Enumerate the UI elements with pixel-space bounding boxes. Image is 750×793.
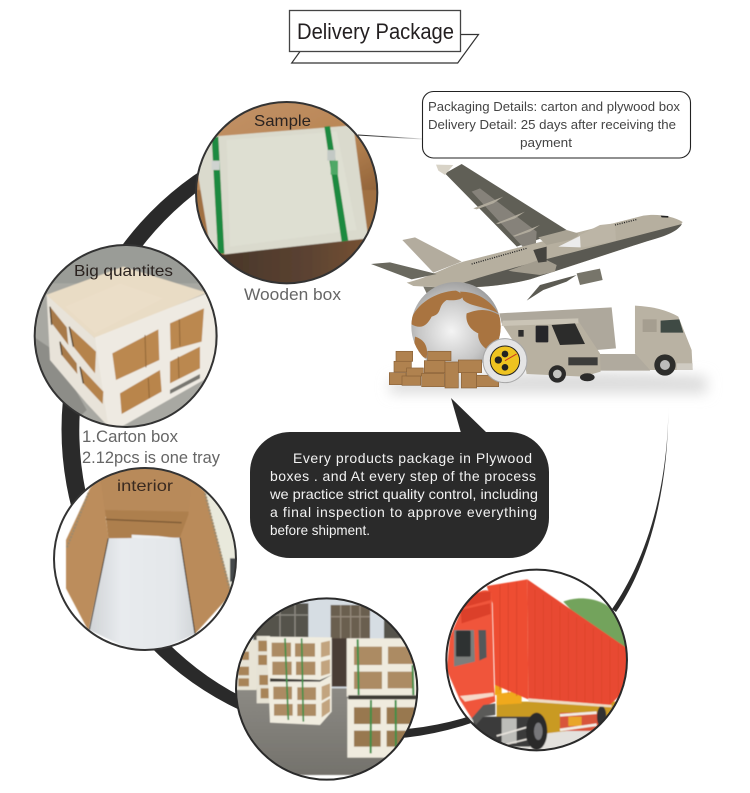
cardboard boxes	[389, 351, 499, 388]
speech bubble: quality control statement: we practice strict quality control, including	[269, 486, 538, 502]
crate stack: right	[347, 638, 417, 758]
callout: packaging and delivery details: payment	[520, 135, 572, 150]
callout: packaging and delivery details: Packaging Details: carton and plywood box	[428, 99, 681, 114]
photo circle: sample wooden box: Sample	[254, 113, 311, 130]
crate stack: far left	[237, 636, 270, 703]
tree	[563, 598, 628, 650]
crate stack: middle	[267, 637, 332, 725]
label: carton box note: 1.Carton box	[82, 427, 178, 446]
speech bubble: quality control statement: a final inspection to approve everything	[270, 504, 537, 520]
photo circle: big quantities carton crate	[34, 244, 218, 428]
callout: packaging and delivery details: Delivery Detail: 25 days after receiving the	[428, 117, 676, 132]
label: wooden box: Wooden box	[244, 286, 342, 304]
speech bubble: quality control statement	[250, 398, 549, 558]
title: Delivery Package	[297, 19, 454, 44]
trailer	[527, 579, 627, 705]
curved black connector ring	[62, 168, 668, 739]
stopwatch	[483, 339, 527, 383]
thin line from sample photo to details box	[358, 135, 422, 139]
callout: packaging and delivery details	[422, 92, 690, 158]
label: carton box note: 2.12pcs is one tray	[82, 448, 220, 467]
van	[502, 318, 601, 383]
speech bubble: quality control statement: Every products package in Plywood	[293, 450, 532, 466]
title	[290, 10, 478, 63]
photo circle: red truck	[446, 570, 633, 753]
airplane	[371, 164, 683, 301]
photo circle: big quantities carton crate: Big quantites	[74, 263, 173, 280]
photo circle: sample wooden box	[190, 97, 383, 290]
label: carton box note	[82, 427, 220, 467]
photo circle: carton interior	[54, 467, 245, 657]
speech bubble: quality control statement: boxes . and At every step of the process	[270, 468, 536, 484]
speech bubble: quality control statement: before shipment.	[270, 522, 370, 538]
photo circle: warehouse crates	[235, 597, 418, 781]
chassis and wheels	[473, 685, 620, 750]
illustration: plane, globe, van and truck	[371, 164, 707, 393]
rear truck	[499, 306, 693, 376]
photo circle: carton interior: interior	[117, 478, 174, 495]
cab	[447, 590, 495, 718]
ground shadow	[390, 372, 707, 393]
globe	[411, 282, 501, 363]
